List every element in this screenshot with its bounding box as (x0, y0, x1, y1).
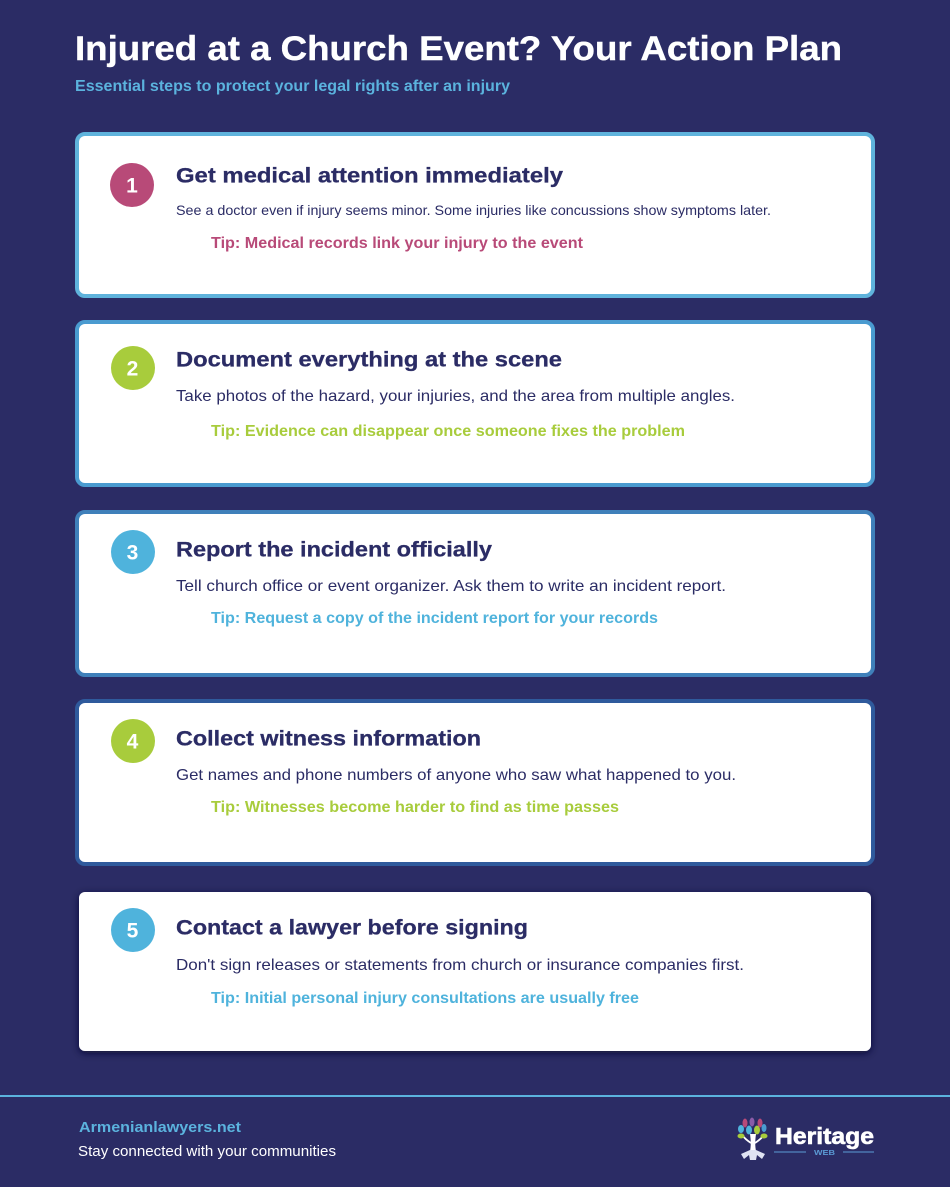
step 2 number badge: 2 (127, 358, 138, 380)
panel: step 3 (77, 512, 873, 675)
step 1 tip: Tip: Medical records link your injury to the event (211, 235, 584, 252)
footer tagline: Stay connected with your communities (78, 1144, 336, 1160)
step 4 tip: Tip: Witnesses become harder to find as time passes (211, 799, 619, 816)
step 5 number badge: 5 (127, 920, 139, 942)
panel: step 1 (77, 134, 873, 296)
step 5 description: Don't sign releases or statements from church or insurance companies first. (176, 957, 744, 974)
step 2 number badge (111, 346, 155, 390)
step 2 description: Take photos of the hazard, your injuries, and the area from multiple angles. (176, 388, 735, 405)
title: Injured at a Church Event? Your Action Plan (75, 30, 842, 68)
step 1 number badge (110, 163, 154, 207)
step 4 description: Get names and phone numbers of anyone who saw what happened to you. (176, 767, 736, 784)
logo subtext: WEB (814, 1148, 836, 1157)
panel: step 4 (77, 701, 873, 864)
step 5 tip: Tip: Initial personal injury consultations are usually free (211, 990, 639, 1007)
step 4 number badge (111, 719, 155, 763)
step 1 number badge: 1 (126, 174, 138, 198)
step 2 tip: Tip: Evidence can disappear once someone fixes the problem (211, 423, 685, 440)
panel: step 2 (77, 322, 873, 485)
step 2 heading: Document everything at the scene (176, 348, 562, 372)
subtitle: Essential steps to protect your legal rights after an injury (75, 78, 510, 95)
step 4 number badge: 4 (127, 730, 139, 754)
step 3 heading: Report the incident officially (176, 538, 492, 562)
step 3 description: Tell church office or event organizer. Ask them to write an incident report. (176, 578, 726, 595)
step 4 heading: Collect witness information (176, 726, 481, 750)
step 1 heading: Get medical attention immediately (176, 164, 563, 188)
logo: Heritage Web (738, 1118, 874, 1160)
step 5 number badge (111, 908, 155, 952)
step 3 tip: Tip: Request a copy of the incident report for your records (211, 610, 658, 627)
step 5 heading: Contact a lawyer before signing (176, 916, 528, 940)
step 3 number badge (111, 530, 155, 574)
panel: step 5 (79, 892, 871, 1051)
step 1 description: See a doctor even if injury seems minor. Some injuries like concussions show symptoms later. (176, 202, 771, 218)
step 3 number badge: 3 (127, 542, 138, 564)
icon: tree (738, 1118, 768, 1160)
logo wordmark: Heritage (775, 1123, 874, 1149)
footer website: Armenianlawyers.net (79, 1119, 241, 1136)
